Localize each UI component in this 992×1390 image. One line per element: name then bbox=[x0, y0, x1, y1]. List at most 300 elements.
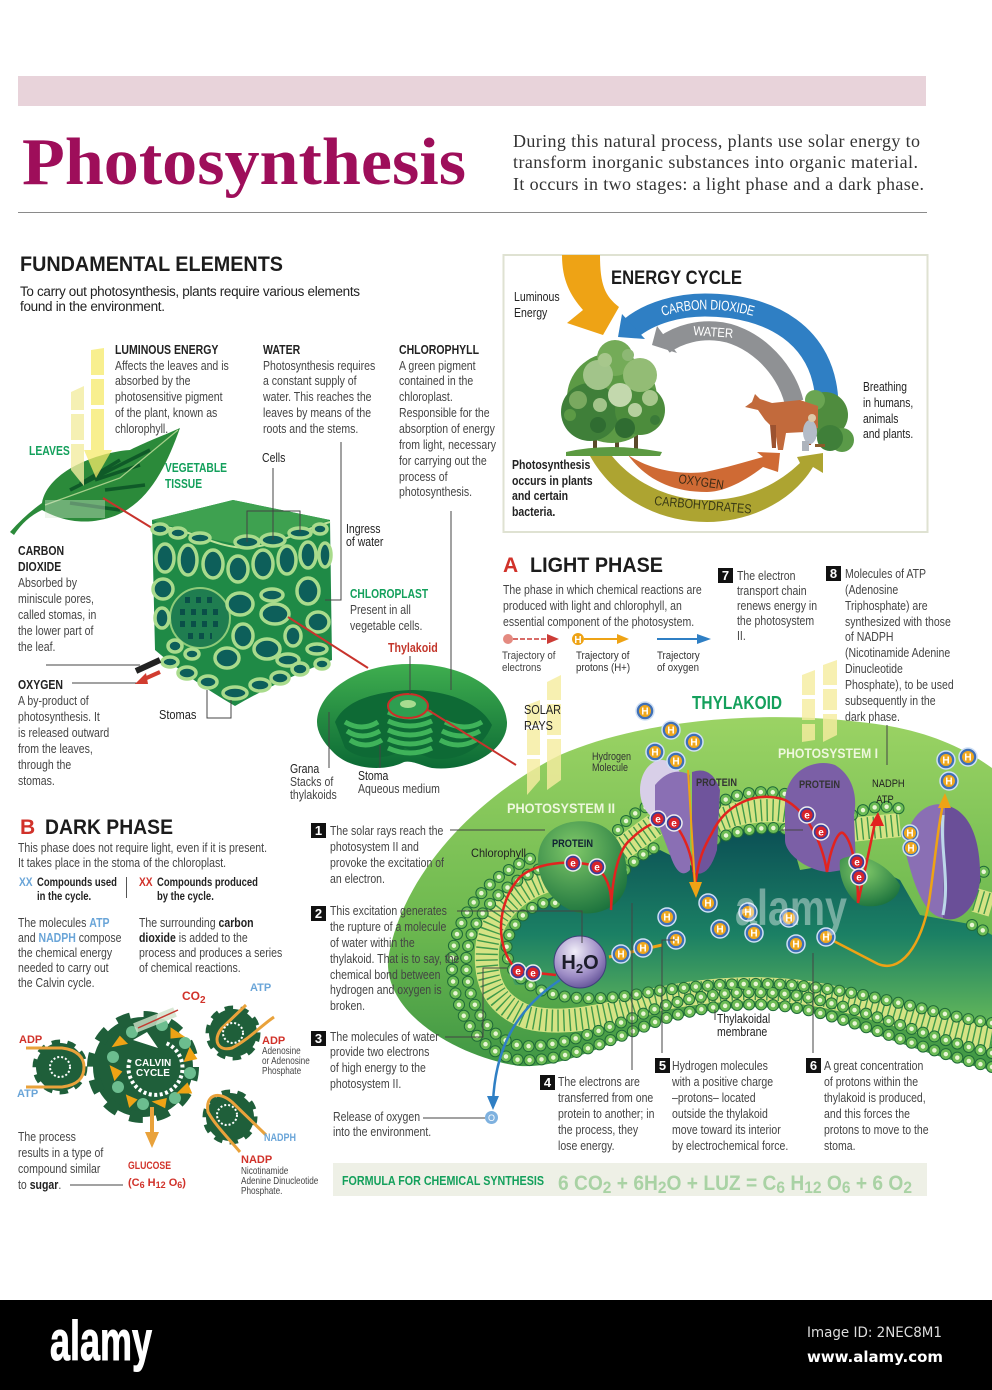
text: water: roots and the stems. bbox=[263, 421, 358, 436]
label: nadph: NADPH bbox=[264, 1132, 296, 1144]
text: carbon dioxide: DIOXIDE bbox=[18, 559, 61, 574]
label: adp right: Adenosine bbox=[262, 1045, 301, 1056]
hydrogen ions: H bbox=[672, 936, 680, 946]
electrons: e bbox=[854, 858, 860, 868]
step 7 bbox=[718, 568, 817, 643]
text: oxygen: stomas. bbox=[18, 773, 55, 788]
key: compounds produced: XX bbox=[139, 876, 153, 889]
text: result sugar: to bbox=[18, 1177, 30, 1192]
step 2: 2 bbox=[315, 906, 322, 921]
energy cycle heading: ENERGY CYCLE bbox=[611, 268, 742, 289]
leader: photosystem I bbox=[886, 725, 888, 765]
step 5: outside the thylakoid bbox=[672, 1106, 768, 1121]
protein: atp synthase bbox=[640, 760, 720, 874]
step 7: renews energy in bbox=[737, 598, 817, 613]
step 6: of protons within the bbox=[824, 1074, 918, 1089]
text: result sugar: compound similar bbox=[18, 1161, 100, 1176]
hydrogen ions: H bbox=[750, 928, 758, 940]
text: chloroplast: Present in all bbox=[350, 602, 411, 617]
step 7: transport chain bbox=[737, 583, 807, 598]
step 4: lose energy. bbox=[558, 1138, 615, 1153]
step 5: Hydrogen molecules bbox=[672, 1058, 768, 1073]
legend: oxygen bbox=[657, 634, 711, 674]
step 4 bbox=[540, 903, 654, 1153]
key: compounds used: in the cycle. bbox=[37, 890, 91, 903]
label: nadph atp: NADPH bbox=[872, 778, 905, 790]
step 3: provide two electrons bbox=[330, 1044, 429, 1059]
hydrogen ions bbox=[612, 702, 977, 963]
step 8: subsequently in the bbox=[845, 693, 936, 708]
leader: chlorophyll bbox=[450, 511, 452, 690]
step 8: 8 bbox=[830, 566, 837, 581]
light phase description: essential component of the photosystem. bbox=[503, 614, 694, 629]
label: chlorophyll: Chlorophyll bbox=[471, 846, 526, 860]
protein: right synthase bbox=[905, 804, 980, 919]
step 6: thylakoid is produced, bbox=[824, 1090, 926, 1105]
step 1: 1 bbox=[315, 823, 322, 838]
step 8: Phosphate), to be used bbox=[845, 677, 954, 692]
watermark: alamy bbox=[735, 880, 847, 936]
callout: stoma: Stoma bbox=[358, 768, 389, 783]
arrow: cell to chloroplast bbox=[288, 617, 368, 668]
arrow: glucose out bbox=[145, 1107, 159, 1148]
label: protein atp: PROTEIN bbox=[696, 777, 737, 789]
illustration: cow and farmer bbox=[745, 390, 854, 452]
step 8: of NADPH bbox=[845, 629, 893, 644]
label: hydrogen molecule: Molecule bbox=[592, 762, 628, 774]
oxygen path bbox=[487, 980, 560, 1110]
text: oxygen: from the leaves, bbox=[18, 741, 93, 756]
header band bbox=[18, 76, 926, 106]
text: chloroplast: CHLOROPLAST bbox=[350, 587, 429, 601]
callout: ingress of water bbox=[325, 442, 383, 600]
protein: photosystem I bbox=[785, 763, 856, 872]
electrons: e bbox=[804, 810, 810, 822]
formula: 2 bbox=[603, 1178, 611, 1197]
step 8: synthesized with those bbox=[845, 614, 951, 629]
text: atp and nadph: the chemical energy bbox=[18, 945, 112, 960]
label: nadp: Adenine Dinucleotide bbox=[241, 1175, 318, 1186]
text: water: WATER bbox=[263, 342, 301, 357]
step 8: (Nicotinamide Adenine bbox=[845, 645, 951, 660]
callout: grana: thylakoids bbox=[290, 787, 337, 802]
fundamental elements intro: found in the environment. bbox=[20, 299, 165, 314]
electrons: e bbox=[856, 872, 862, 884]
label: thylakoid: Thylakoid bbox=[388, 640, 438, 655]
label: hydrogen molecule: Hydrogen bbox=[592, 751, 631, 763]
dark phase description: This phase does not require light, even if it is present. bbox=[18, 840, 267, 855]
intro text: It occurs in two stages: a light phase and a dark phase. bbox=[513, 174, 924, 194]
step 3: photosystem II. bbox=[330, 1076, 401, 1091]
text: carbon dioxide: Absorbed by bbox=[18, 575, 77, 590]
legend: electrons: electrons bbox=[502, 663, 541, 674]
text: carbon dioxide: the lower part of bbox=[18, 623, 94, 638]
formula: + 6 O bbox=[851, 1172, 903, 1195]
legend: electrons: Trajectory of bbox=[502, 651, 556, 662]
text: carbon dioxide added: carbon bbox=[219, 915, 254, 930]
step 6: protons to move to the bbox=[824, 1122, 929, 1137]
legend: electrons bbox=[502, 634, 559, 674]
arrow: carbon dioxide bbox=[618, 294, 838, 396]
text: oxygen: OXYGEN bbox=[18, 677, 63, 692]
legend: protons bbox=[572, 633, 630, 674]
step 2: chemical bond between bbox=[330, 967, 440, 982]
hydrogen ions: H bbox=[964, 752, 972, 764]
label: solar rays: RAYS bbox=[524, 718, 553, 733]
formula: + 6H bbox=[611, 1172, 658, 1195]
text: chloroplast: vegetable cells. bbox=[350, 618, 422, 633]
label: adp left: ADP bbox=[19, 1034, 42, 1046]
key: compounds produced: by the cycle. bbox=[157, 890, 214, 903]
label: protein II: PROTEIN bbox=[552, 838, 593, 850]
formula: 6 bbox=[842, 1178, 851, 1197]
arrow: leaf to tissue bbox=[103, 498, 152, 528]
callout: cells: Cells bbox=[262, 450, 285, 465]
label: adp right: ADP bbox=[262, 1035, 285, 1047]
text: result sugar: sugar. bbox=[30, 1177, 61, 1192]
light phase description: produced with light and chlorophyll, an bbox=[503, 598, 682, 613]
label: glucose: H bbox=[145, 1177, 156, 1189]
arrowhead: electron bbox=[870, 812, 884, 826]
panel: energy cycle bbox=[502, 254, 928, 533]
key: compounds used: Compounds used bbox=[37, 876, 117, 889]
text: chloroplast bbox=[350, 587, 429, 633]
step 3: 3 bbox=[315, 1031, 322, 1046]
illustration: thylakoid bbox=[388, 660, 992, 1110]
dark phase description: It takes place in the stoma of the chloroplast. bbox=[18, 855, 226, 870]
step 5: with a positive charge bbox=[671, 1074, 773, 1089]
illustration: trees bbox=[561, 340, 665, 456]
hydrogen ions: H bbox=[704, 898, 712, 910]
text: water: leaves by means of the bbox=[263, 405, 372, 420]
text: chlorophyll: absorption of energy bbox=[399, 421, 495, 436]
label: calvin cycle: CALVIN bbox=[135, 1058, 171, 1069]
label: thylakoidal membrane: membrane bbox=[717, 1024, 768, 1039]
protein: photosystem II bbox=[538, 821, 627, 913]
footer logo: alamy bbox=[50, 1309, 152, 1372]
step 2: hydrogen and oxygen is bbox=[330, 982, 442, 997]
hydrogen ions: H bbox=[672, 756, 680, 768]
hydrogen ions: H bbox=[744, 908, 752, 918]
step 6: and this forces the bbox=[824, 1106, 910, 1121]
icon: leaf with sun rays bbox=[10, 348, 180, 535]
arrow: water bbox=[652, 323, 794, 402]
text: atp and nadph: needed to carry out bbox=[18, 960, 109, 975]
step 8: Dinucleotide bbox=[845, 661, 903, 676]
electrons: e bbox=[515, 966, 521, 978]
callout: grana: Grana bbox=[290, 761, 320, 776]
label: atp top: ATP bbox=[250, 982, 271, 994]
step 2: the rupture of a molecule bbox=[330, 919, 447, 934]
legend: protons: H bbox=[574, 635, 582, 646]
text: atp and nadph: NADPH compose bbox=[38, 930, 121, 945]
label: adp right bbox=[262, 1035, 310, 1076]
step 1: provoke the excitation of bbox=[330, 855, 445, 870]
callout: stomas: Stomas bbox=[159, 707, 196, 722]
callout: ingress of water: of water bbox=[346, 534, 383, 549]
label: nadp: Phosphate. bbox=[241, 1185, 282, 1196]
hydrogen ions: H bbox=[667, 726, 675, 736]
hydrogen ions: H bbox=[907, 844, 915, 854]
label: glucose: 12 bbox=[156, 1180, 166, 1190]
light phase description: The phase in which chemical reactions are bbox=[503, 582, 702, 597]
arrow: co2 in bbox=[135, 1010, 178, 1028]
label: co2: 2 bbox=[200, 995, 206, 1006]
gear: left adp atp bbox=[26, 1043, 84, 1091]
step 5: move toward its interior bbox=[672, 1122, 781, 1137]
step 4: The electrons are bbox=[558, 1074, 640, 1089]
label: adp right: Phosphate bbox=[262, 1065, 301, 1076]
text: luminous energy: of the plant, known as bbox=[115, 405, 217, 420]
text: luminous energy: chlorophyll. bbox=[115, 421, 168, 436]
text: oxygen: A by-product of bbox=[18, 693, 89, 708]
callout: cells bbox=[247, 450, 300, 542]
step 6 bbox=[806, 953, 929, 1153]
heading: light phase: LIGHT PHASE bbox=[530, 554, 663, 577]
text: oxygen: photosynthesis. It bbox=[18, 709, 100, 724]
hydrogen ions: H bbox=[792, 940, 800, 950]
label: glucose: (C bbox=[128, 1177, 140, 1189]
step 4: protein to another; in bbox=[558, 1106, 654, 1121]
water molecule: O bbox=[583, 952, 599, 974]
label: nadp bbox=[241, 1154, 318, 1196]
label: calvin cycle: CYCLE bbox=[136, 1068, 170, 1079]
text: water: Photosynthesis requires bbox=[263, 358, 375, 373]
text: oxygen: is released outward bbox=[18, 725, 109, 740]
intro text: During this natural process, plants use solar energy to bbox=[513, 131, 920, 151]
arrow: oxygen bbox=[628, 452, 780, 493]
text: chlorophyll: CHLOROPHYLL bbox=[399, 342, 479, 357]
hydrogen ions: H bbox=[942, 756, 950, 766]
label: adp right: or Adenosine bbox=[262, 1055, 310, 1066]
oxygen release: Release of oxygen bbox=[333, 1109, 420, 1124]
water molecule bbox=[554, 936, 606, 988]
intro text: transform inorganic substances into organic material. bbox=[513, 152, 918, 172]
label: breathing: Breathing bbox=[863, 380, 907, 394]
key: compounds used bbox=[19, 876, 117, 903]
label: co2: CO bbox=[182, 989, 200, 1003]
step 3: The molecules of water bbox=[330, 1029, 439, 1044]
arrows: stomata gases bbox=[46, 660, 160, 684]
text: chlorophyll bbox=[399, 342, 496, 499]
step 1 bbox=[311, 823, 545, 886]
gear: top right atp adp bbox=[209, 1005, 274, 1057]
step 6: A great concentration bbox=[824, 1058, 923, 1073]
illustration: vegetable tissue cube bbox=[152, 500, 332, 706]
text: oxygen: through the bbox=[18, 757, 72, 772]
label: leaves: LEAVES bbox=[29, 444, 70, 458]
step 7: II. bbox=[737, 628, 746, 643]
text: carbon dioxide: miniscule pores, bbox=[18, 591, 94, 606]
step 5: by electrochemical force. bbox=[672, 1138, 788, 1153]
step 1: an electron. bbox=[330, 871, 385, 886]
heading: light phase: A bbox=[503, 554, 518, 577]
text: carbon dioxide: called stomas, in bbox=[18, 607, 96, 622]
text: oxygen bbox=[18, 677, 109, 788]
label: thylakoid bbox=[388, 640, 438, 694]
text: carbon dioxide: CARBON bbox=[18, 543, 64, 558]
label: glucose: GLUCOSE bbox=[128, 1160, 171, 1172]
label: luminous energy: Luminous bbox=[514, 289, 560, 304]
formula: H bbox=[785, 1172, 804, 1195]
legend: oxygen: of oxygen bbox=[657, 663, 699, 674]
text: luminous energy: Affects the leaves and is bbox=[115, 358, 229, 373]
lipid bilayer bbox=[452, 792, 992, 1067]
step 2: broken. bbox=[330, 998, 365, 1013]
formula: O bbox=[822, 1172, 842, 1195]
step 2: thylakoid. That is to say, the bbox=[330, 951, 460, 966]
proton path up bbox=[826, 793, 951, 966]
electrons bbox=[510, 807, 867, 981]
text: atp and nadph: The molecules bbox=[18, 915, 89, 930]
formula panel bbox=[333, 1163, 927, 1197]
step 5: 5 bbox=[659, 1058, 666, 1073]
footer bar bbox=[0, 1300, 992, 1390]
legend: oxygen: Trajectory bbox=[657, 651, 700, 662]
arrow: carbon dioxide: CARBON DIOXIDE bbox=[662, 300, 755, 316]
formula: 2 bbox=[658, 1178, 667, 1197]
step 4: 4 bbox=[544, 1075, 552, 1090]
label: luminous energy: Energy bbox=[514, 305, 547, 320]
fundamental elements intro: To carry out photosynthesis, plants require various elements bbox=[20, 284, 360, 299]
arrow: luminous energy bbox=[562, 255, 619, 335]
step 1: photosystem II and bbox=[330, 839, 419, 854]
solar rays bbox=[527, 660, 837, 795]
label: protein I: PROTEIN bbox=[799, 779, 840, 791]
label: glucose: 6 bbox=[177, 1180, 182, 1190]
legend: protons: protons (H+) bbox=[576, 663, 630, 674]
electron path bbox=[501, 797, 876, 975]
label: glucose: O bbox=[166, 1177, 178, 1189]
electrons: e bbox=[530, 968, 536, 980]
label: atp left: ATP bbox=[17, 1088, 38, 1100]
label: thylakoidal membrane bbox=[715, 1010, 770, 1039]
hydrogen ions: H bbox=[663, 912, 671, 924]
text: carbon dioxide added: is added to the bbox=[176, 930, 248, 945]
hydrogen ions: H bbox=[639, 944, 647, 954]
text: carbon dioxide added: The surrounding bbox=[139, 915, 219, 930]
text: carbon dioxide bbox=[18, 543, 96, 654]
label: photosystem I: PHOTOSYSTEM I bbox=[778, 745, 878, 761]
label: vegetable tissue: VEGETABLE bbox=[165, 461, 227, 475]
step 3: of high energy to the bbox=[330, 1060, 426, 1075]
hydrogen ions: H bbox=[822, 932, 830, 944]
water molecule: 2 bbox=[576, 961, 583, 976]
label: vegetable tissue: TISSUE bbox=[165, 477, 202, 491]
diagram: calvin cycle gears bbox=[17, 982, 318, 1196]
thylakoid body bbox=[388, 717, 992, 1070]
arrow: chloroplast to thylakoid bbox=[428, 710, 516, 765]
step 8: Triphosphate) are bbox=[845, 598, 928, 613]
callout: stoma: Aqueous medium bbox=[358, 781, 440, 796]
title: Photosynthesis bbox=[22, 125, 466, 199]
text: carbon dioxide: the leaf. bbox=[18, 639, 55, 654]
heading: dark phase: B bbox=[20, 816, 35, 839]
electrons: e bbox=[655, 814, 661, 826]
label: nadp: Nicotinamide bbox=[241, 1165, 288, 1176]
label: breathing: animals bbox=[863, 412, 898, 426]
step 1: The solar rays reach the bbox=[330, 823, 444, 838]
gear: calvin cycle bbox=[93, 1017, 196, 1117]
text: carbon dioxide added: dioxide bbox=[139, 930, 176, 945]
text: luminous energy bbox=[115, 342, 229, 436]
step 8 bbox=[826, 566, 954, 724]
proton path from water bbox=[609, 945, 662, 957]
formula label: FORMULA FOR CHEMICAL SYNTHESIS bbox=[342, 1173, 544, 1188]
step 4: transferred from one bbox=[558, 1090, 654, 1105]
step 2: of water within the bbox=[330, 935, 415, 950]
electrons: e bbox=[594, 862, 600, 874]
leader: protein I bbox=[781, 829, 803, 831]
label: photosynthesis occurs: bacteria. bbox=[512, 504, 555, 519]
arrow: water: WATER bbox=[693, 323, 734, 341]
label: thylakoid heading: THYLAKOID bbox=[692, 693, 782, 713]
hydrogen ions: H bbox=[716, 924, 724, 936]
text: water: a constant supply of bbox=[263, 373, 357, 388]
step 4: the process, they bbox=[558, 1122, 638, 1137]
gear: bottom right nadp bbox=[206, 1093, 266, 1152]
text: result sugar: The process bbox=[18, 1129, 76, 1144]
oxygen release: into the environment. bbox=[333, 1124, 431, 1139]
text: atp and nadph: and bbox=[18, 930, 38, 945]
electrons: e bbox=[570, 858, 576, 870]
proton path down bbox=[688, 770, 702, 898]
step 7: the photosystem bbox=[737, 613, 814, 628]
hydrogen ions: H bbox=[785, 914, 793, 924]
footer url: www.alamy.com bbox=[807, 1348, 943, 1366]
hydrogen ions: H bbox=[690, 738, 698, 748]
step 6: stoma. bbox=[824, 1138, 856, 1153]
arrow: carbohydrates bbox=[590, 453, 823, 522]
label: nadp: NADP bbox=[241, 1154, 272, 1166]
text: water bbox=[262, 342, 375, 436]
formula: 12 bbox=[804, 1178, 822, 1197]
text: chlorophyll: for carrying out the bbox=[399, 453, 487, 468]
formula: O + LUZ = C bbox=[667, 1172, 776, 1195]
text: chlorophyll: chloroplast. bbox=[399, 389, 453, 404]
step 7: The electron bbox=[737, 568, 795, 583]
step 8: (Adenosine bbox=[845, 582, 899, 597]
label: breathing: in humans, bbox=[863, 396, 913, 410]
footer image id: Image ID: 2NEC8M1 bbox=[807, 1325, 942, 1341]
text: atp and nadph: ATP bbox=[89, 915, 110, 930]
oxygen release bbox=[333, 1109, 498, 1139]
text: chlorophyll: photosynthesis. bbox=[399, 484, 472, 499]
text: chlorophyll: process of bbox=[399, 469, 448, 484]
callout: stomas bbox=[159, 690, 231, 722]
step 8: Molecules of ATP bbox=[845, 566, 926, 581]
label: photosynthesis occurs: and certain bbox=[512, 488, 568, 503]
step 7: 7 bbox=[722, 568, 729, 583]
text: luminous energy: LUMINOUS ENERGY bbox=[115, 342, 219, 357]
protein: small green bbox=[840, 856, 900, 906]
label: breathing: and plants. bbox=[863, 427, 913, 441]
hydrogen ions: H bbox=[641, 706, 649, 718]
step 5 bbox=[655, 940, 788, 1153]
callout: grana bbox=[290, 712, 337, 802]
oxygen release: O bbox=[488, 1113, 495, 1123]
text: luminous energy: absorbed by the bbox=[115, 373, 191, 388]
label: glucose: ) bbox=[182, 1177, 186, 1189]
label: photosynthesis occurs: occurs in plants bbox=[512, 473, 593, 488]
legend: trajectories bbox=[502, 633, 711, 674]
arrow: carbohydrates: CARBOHYDRATES bbox=[654, 493, 752, 517]
key: compounds used: XX bbox=[19, 876, 33, 889]
text: carbon dioxide added: process and produces a series bbox=[139, 945, 282, 960]
text: chlorophyll: A green pigment bbox=[399, 358, 476, 373]
formula: 2 bbox=[903, 1178, 912, 1197]
text: result sugar: results in a type of bbox=[18, 1145, 104, 1160]
